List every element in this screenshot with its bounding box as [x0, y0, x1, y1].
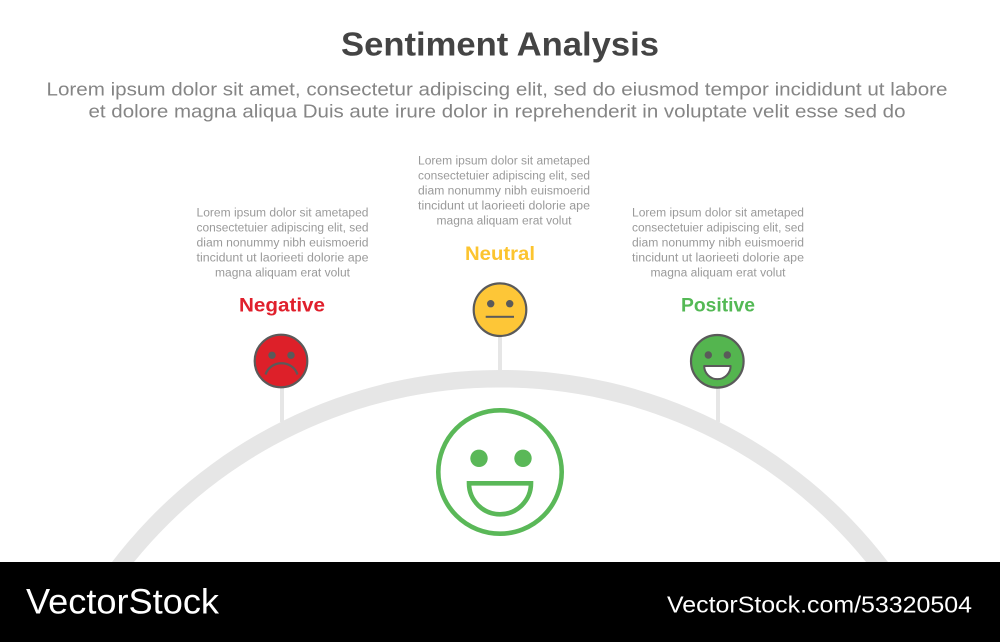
negative description: consectetuier adipiscing elit, sed: [196, 223, 368, 235]
negative description: diam nonummy nibh euismoerid: [196, 238, 368, 250]
negative description: magna aliquam erat volut: [215, 267, 351, 279]
footer url: VectorStock.com/53320504: [667, 592, 972, 618]
icon: happy face: [691, 335, 744, 388]
neutral description: diam nonummy nibh euismoerid: [418, 186, 590, 198]
footer bar: [0, 562, 1000, 642]
positive description: tincidunt ut laorieeti dolorie ape: [632, 252, 804, 264]
positive heading: Positive: [681, 296, 755, 316]
positive description: diam nonummy nibh euismoerid: [632, 238, 804, 250]
neutral description: consectetuier adipiscing elit, sed: [418, 171, 590, 183]
title: Sentiment Analysis: [341, 26, 659, 62]
neutral description: tincidunt ut laorieeti dolorie ape: [418, 200, 590, 212]
neutral description: [418, 156, 590, 227]
positive description: Lorem ipsum dolor sit ametaped: [632, 208, 804, 220]
large arc: [112, 370, 888, 562]
negative heading: Negative: [239, 296, 325, 316]
negative connector: [280, 388, 284, 422]
subtitle text: et dolore magna aliqua Duis aute irure dolor in reprehenderit in voluptate velit esse sed do: [88, 100, 906, 122]
negative description: tincidunt ut laorieeti dolorie ape: [196, 252, 368, 264]
subtitle text: [46, 78, 948, 122]
positive connector: [716, 388, 720, 422]
panel: negative: [196, 208, 368, 422]
icon: neutral face: [474, 283, 526, 336]
negative description: [196, 208, 368, 279]
icon: sad face: [255, 335, 307, 387]
panel: neutral: [418, 156, 590, 372]
subtitle text: Lorem ipsum dolor sit amet, consectetur adipiscing elit, sed do eiusmod tempor incididunt ut labore: [46, 78, 948, 100]
footer logo: VectorStock: [26, 582, 219, 622]
neutral connector: [498, 336, 502, 372]
positive description: [632, 208, 804, 279]
neutral description: Lorem ipsum dolor sit ametaped: [418, 156, 590, 168]
positive description: consectetuier adipiscing elit, sed: [632, 223, 804, 235]
negative description: Lorem ipsum dolor sit ametaped: [196, 208, 368, 220]
panel: positive: [632, 208, 804, 422]
positive description: magna aliquam erat volut: [650, 267, 786, 279]
neutral description: magna aliquam erat volut: [436, 215, 572, 227]
icon: large smiley: [438, 410, 562, 534]
neutral heading: Neutral: [465, 244, 535, 265]
